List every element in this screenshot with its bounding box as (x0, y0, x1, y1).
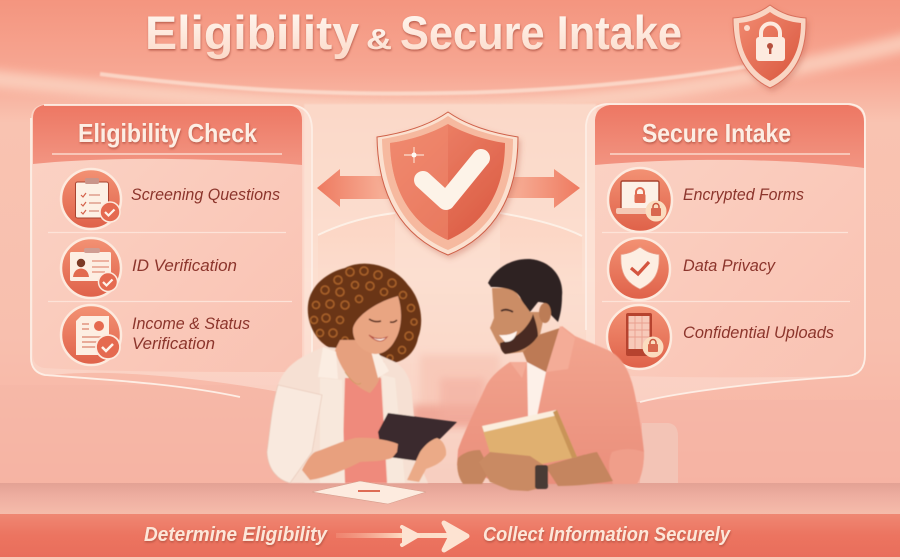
icon: central check shield (377, 112, 518, 255)
label: id verification: ID Verification (132, 256, 237, 275)
forearms (457, 450, 490, 484)
arms (302, 438, 398, 480)
icon: padlock shield (733, 5, 806, 88)
title: Eligibility (145, 6, 359, 59)
caption: collect information securely: Collect Information Securely (483, 524, 731, 546)
label: screening questions: Screening Questions (131, 185, 280, 204)
panel header (595, 105, 864, 168)
label: confidential uploads: Confidential Uploads (683, 323, 834, 342)
label: income and status verification: Income & Status (132, 314, 250, 333)
face (353, 296, 401, 354)
icon: id card (61, 238, 121, 298)
icon: clipboard checklist (61, 169, 121, 229)
title: & (366, 24, 392, 56)
icon: confidential upload tablet (607, 305, 671, 369)
arrow: toward eligibility check (317, 169, 390, 207)
arrow: flow to secure collection (336, 523, 467, 550)
paper on table (312, 481, 426, 504)
jacket (267, 347, 428, 483)
arrow: toward secure intake (505, 169, 580, 208)
hair (308, 264, 421, 363)
title: Secure Intake (400, 6, 682, 59)
person: woman with tablet (267, 264, 457, 483)
icon: income document (61, 305, 121, 365)
shirt (457, 326, 644, 484)
label: data privacy: Data Privacy (683, 256, 776, 275)
label: income and status verification: Verification (132, 334, 215, 353)
hands (479, 452, 548, 491)
tablet (378, 413, 457, 461)
neck and head (522, 328, 562, 372)
panel: secure intake (586, 104, 865, 402)
person: man with folder (457, 259, 644, 491)
label: income and status verification (132, 314, 250, 353)
table (0, 483, 900, 516)
label: encrypted forms: Encrypted Forms (683, 185, 804, 204)
caption: determine eligibility: Determine Eligibility (144, 524, 328, 546)
heading: Eligibility Check (78, 118, 257, 148)
rolled sleeve (609, 449, 644, 484)
heading: Secure Intake (642, 118, 791, 148)
bottom banner (0, 514, 900, 560)
folder (482, 410, 577, 464)
icon: encrypted laptop (608, 168, 672, 232)
title (145, 6, 682, 59)
watch (535, 465, 548, 489)
panel: eligibility check (31, 104, 312, 397)
chair (640, 423, 678, 484)
icon: data privacy shield (608, 238, 670, 300)
panel header (33, 105, 302, 165)
